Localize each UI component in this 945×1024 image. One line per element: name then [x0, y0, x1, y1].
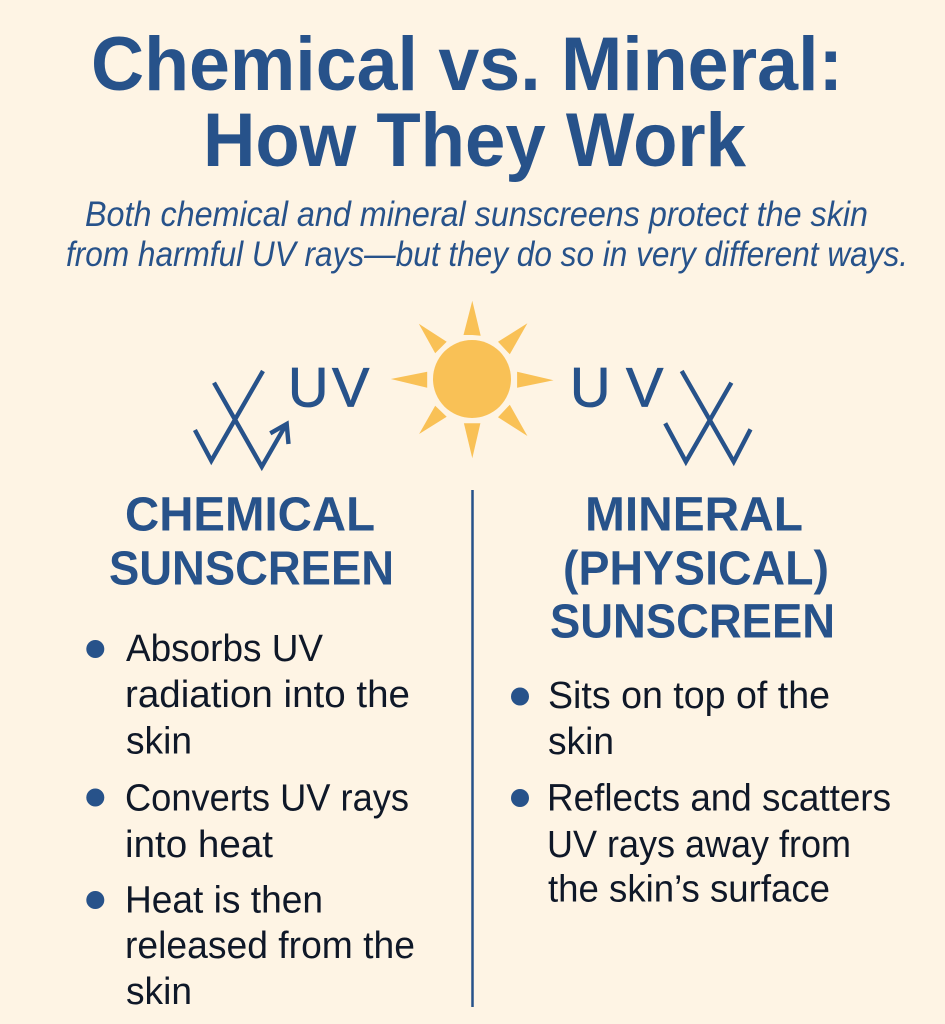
icon: sun	[391, 301, 554, 458]
heading: mineral (physical) sunscreen: MINERAL	[585, 488, 803, 542]
bullet: converts UV rays	[86, 778, 409, 866]
bullet: heat released	[86, 880, 415, 1013]
title	[91, 22, 843, 183]
bullet: sits on top: skin	[548, 721, 614, 763]
bullet: absorbs UV: radiation into the	[125, 674, 410, 716]
title: Chemical vs. Mineral:	[91, 22, 843, 107]
bullet: reflects and scatters: UV rays away from	[547, 824, 851, 866]
bullet: sits on top	[511, 675, 830, 763]
subtitle	[66, 195, 908, 274]
icon: reflected UV rays	[665, 371, 750, 462]
bullet: heat released: skin	[126, 971, 192, 1013]
bullet: converts UV rays: into heat	[125, 824, 273, 866]
heading: mineral (physical) sunscreen: SUNSCREEN	[550, 596, 835, 648]
subtitle: Both chemical and mineral sunscreens protect the skin	[85, 195, 868, 234]
heading: mineral (physical) sunscreen	[550, 488, 835, 648]
bullet: reflects and scatters: the skin’s surface	[548, 868, 830, 910]
bullet: absorbs UV: Absorbs UV	[126, 628, 324, 670]
panel: mineral sunscreen	[511, 488, 891, 910]
left UV label: UV	[288, 356, 370, 418]
bullet: heat released: Heat is then	[125, 880, 323, 922]
panel: chemical sunscreen	[86, 488, 415, 1013]
heading: chemical sunscreen: CHEMICAL	[125, 488, 375, 542]
heading: chemical sunscreen	[109, 488, 394, 596]
right UV label: UV	[570, 356, 664, 418]
bullet: reflects and scatters	[511, 778, 891, 910]
bullet: absorbs UV	[86, 628, 410, 762]
bullet: absorbs UV: skin	[126, 720, 192, 762]
center divider	[471, 490, 474, 1007]
bullet: heat released: released from the	[125, 925, 415, 967]
bullet: sits on top: Sits on top of the	[548, 675, 830, 717]
icon: absorbed UV rays with arrow	[195, 371, 288, 467]
heading: chemical sunscreen: SUNSCREEN	[109, 542, 394, 596]
bullet: reflects and scatters: Reflects and scatters	[547, 778, 891, 820]
heading: mineral (physical) sunscreen: (PHYSICAL)	[563, 542, 829, 596]
title: How They Work	[203, 98, 747, 183]
bullet: converts UV rays: Converts UV rays	[125, 778, 409, 820]
